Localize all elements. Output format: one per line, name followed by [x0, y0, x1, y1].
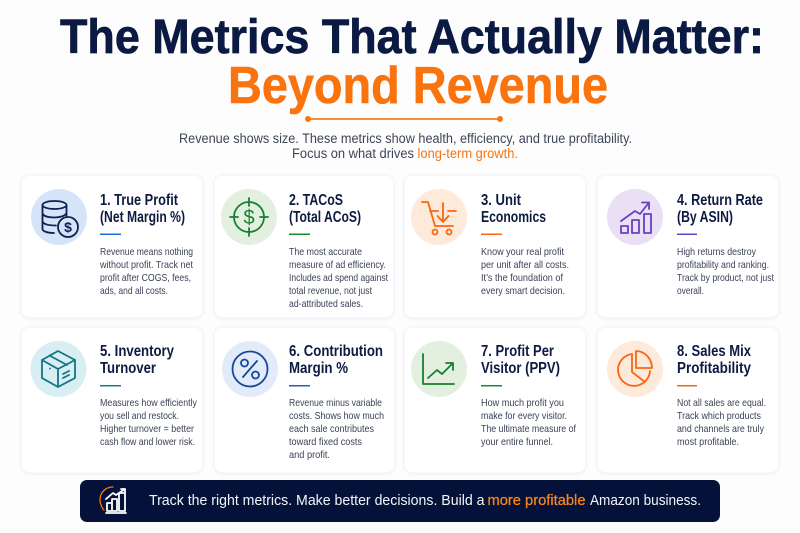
description: How much profit you: [481, 397, 564, 409]
icon: box: [30, 341, 86, 397]
panel: return rate: [597, 175, 779, 318]
description: ad-attributed sales.: [289, 298, 363, 310]
description: make for every visitor.: [481, 410, 567, 422]
description: It’s the foundation of: [481, 272, 563, 284]
icon: rising bars: [607, 189, 663, 245]
heading: (By ASIN): [677, 209, 733, 226]
description: your entire funnel.: [481, 436, 553, 448]
description: Includes ad spend against: [289, 272, 388, 284]
description: and profit.: [289, 449, 330, 461]
banner text: [149, 492, 701, 509]
description: Measures how efficiently: [100, 397, 198, 409]
heading: 2. TACoS: [289, 192, 343, 209]
panel: true profit: [21, 175, 203, 318]
heading: Economics: [481, 209, 546, 226]
heading: 3. Unit: [481, 192, 521, 209]
description: every smart decision.: [481, 285, 565, 297]
heading: 4. Return Rate: [677, 192, 763, 209]
accent line: [289, 385, 310, 386]
icon: line chart: [411, 341, 467, 397]
description: [100, 397, 198, 448]
panel: sales mix: [597, 327, 779, 473]
description: Higher turnover = better: [100, 423, 194, 435]
title: [60, 11, 764, 115]
subtitle: Focus on what drives long-term growth.: [292, 146, 518, 161]
heading: Profitability: [677, 360, 751, 377]
description: [289, 246, 388, 310]
description: [99, 246, 193, 297]
icon: pie chart: [607, 341, 663, 397]
description: most profitable.: [677, 436, 739, 448]
heading: 7. Profit Per: [481, 343, 554, 360]
subtitle: Revenue shows size. These metrics show health, efficiency, and true profitability.: [179, 131, 632, 146]
accent line: [677, 385, 697, 386]
description: without profit. Track net: [99, 259, 193, 271]
heading: Visitor (PPV): [481, 360, 560, 377]
accent line: [481, 234, 502, 235]
heading: [481, 192, 546, 226]
heading: Margin %: [289, 360, 348, 377]
heading: Turnover: [100, 360, 156, 377]
heading: [100, 192, 185, 226]
footer banner: [80, 480, 720, 522]
panel: profit per visitor: [404, 327, 586, 473]
description: each sale contributes: [289, 423, 374, 435]
panel: inventory turnover: [21, 327, 203, 473]
subtitle: [179, 131, 632, 161]
heading: [677, 343, 751, 377]
heading: 6. Contribution: [289, 343, 383, 360]
description: and channels are truly: [677, 423, 765, 435]
panel: contribution margin: [214, 327, 395, 473]
description: measure of ad efficiency.: [289, 259, 386, 271]
description: costs. Shows how much: [289, 410, 384, 422]
description: [481, 246, 569, 297]
accent line: [100, 234, 121, 235]
panel: unit economics: [404, 175, 586, 318]
icon: growth chart: [100, 487, 126, 513]
heading: [481, 343, 560, 377]
title underline: [305, 116, 503, 122]
description: Know your real profit: [481, 246, 564, 258]
description: per unit after all costs.: [481, 259, 569, 271]
description: High returns destroy: [677, 246, 757, 258]
heading: (Net Margin %): [100, 209, 185, 226]
description: overall.: [677, 285, 704, 297]
banner text: Track the right metrics. Make better decisions. Build a: [149, 492, 485, 509]
description: The ultimate measure of: [481, 423, 576, 435]
heading: [100, 343, 174, 377]
icon: coins and dollar: $: [64, 219, 72, 235]
heading: 5. Inventory: [100, 343, 174, 360]
panel: tacos: [214, 175, 394, 318]
title: Beyond Revenue: [228, 57, 608, 115]
description: Revenue minus variable: [289, 397, 382, 409]
description: The most accurate: [289, 246, 362, 258]
accent line: [677, 234, 697, 235]
accent line: [481, 385, 502, 386]
description: [677, 246, 774, 297]
icon: coins and dollar: [31, 189, 87, 245]
description: Track by product, not just: [677, 272, 774, 284]
heading: 1. True Profit: [100, 192, 178, 209]
description: Track which products: [677, 410, 761, 422]
description: you sell and restock.: [100, 410, 179, 422]
description: [481, 397, 576, 448]
accent line: [289, 234, 310, 235]
heading: [677, 192, 763, 226]
icon: target dollar: $: [243, 207, 255, 229]
description: toward fixed costs: [289, 436, 362, 448]
description: cash flow and lower risk.: [100, 436, 195, 448]
icon: percent: [222, 341, 278, 397]
heading: [289, 192, 361, 226]
title: The Metrics That Actually Matter:: [60, 11, 764, 64]
description: profit after COGS, fees,: [100, 272, 191, 284]
description: Not all sales are equal.: [677, 397, 766, 409]
description: profitability and ranking.: [677, 259, 769, 271]
icon: target dollar: [221, 189, 277, 245]
description: ads, and all costs.: [100, 285, 168, 297]
description: [677, 397, 766, 448]
icon: shopping cart: [411, 189, 467, 245]
heading: (Total ACoS): [289, 209, 361, 226]
banner text: more profitable: [488, 492, 586, 509]
banner text: Amazon business.: [590, 492, 701, 509]
heading: 8. Sales Mix: [677, 343, 751, 360]
description: Revenue means nothing: [100, 246, 193, 258]
description: [289, 397, 384, 461]
description: total revenue, not just: [289, 285, 372, 297]
accent line: [100, 385, 121, 386]
heading: [289, 343, 383, 377]
